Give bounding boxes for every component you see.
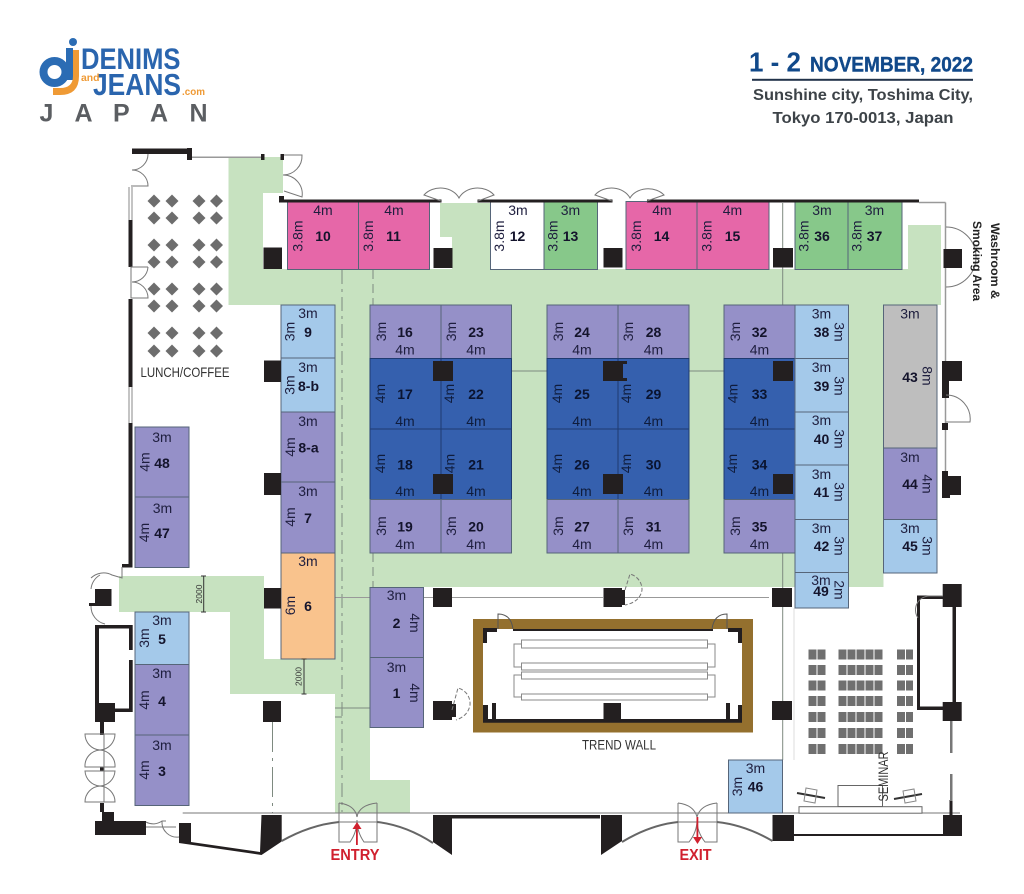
booth 33: 33: [752, 386, 767, 402]
booth 11: [358, 202, 430, 270]
booth 28: 3m: [620, 322, 636, 341]
booth 43: 43: [902, 369, 918, 385]
booth 4: 4: [158, 693, 166, 709]
booth 22: 22: [468, 386, 484, 402]
booth 7: [281, 482, 335, 553]
booth 49: 49: [813, 583, 829, 599]
booth 5: 3m: [152, 612, 172, 628]
booth 10: 3.8m: [290, 220, 306, 252]
booth 22: 4m: [466, 413, 486, 429]
thin building lines: [129, 157, 960, 813]
booth 28: [618, 305, 689, 358]
booth 35: [724, 500, 795, 553]
booth 44: 4m: [920, 474, 936, 494]
arrow: entry: [352, 822, 362, 845]
booth 2: 2: [393, 615, 401, 631]
dimension marker: 2000 top: 2000: [194, 584, 204, 603]
booth 13: 3.8m: [544, 220, 560, 252]
booth 1: 1: [393, 685, 401, 701]
booth 24: 4m: [572, 342, 592, 358]
label: washroom and smoking area: [970, 221, 1002, 301]
booth 41: [795, 465, 848, 520]
booth 12: 3.8m: [491, 220, 507, 252]
booth 4: [135, 664, 189, 735]
booth 48: 4m: [136, 452, 152, 472]
booth 16: [370, 305, 441, 358]
booth 15: 4m: [723, 202, 742, 218]
booth 23: 23: [468, 324, 484, 340]
booth 44: 44: [902, 476, 918, 492]
booth 8-a: [281, 412, 335, 482]
booth 8-b: 8-b: [298, 378, 319, 394]
booth 18: 4m: [372, 454, 388, 473]
booth 5: [135, 612, 189, 664]
label: washroom and smoking area: Washroom &: [988, 223, 1002, 299]
booth 27: 3m: [550, 516, 566, 536]
booth 48: 3m: [152, 429, 172, 445]
booth 40: 3m: [832, 429, 848, 449]
booth 1: 4m: [407, 683, 423, 703]
booth 23: 4m: [466, 342, 486, 358]
booth 24: 3m: [550, 322, 566, 341]
booth 38: 3m: [832, 322, 848, 342]
booth 26: [547, 429, 618, 500]
booth 2: 4m: [407, 613, 423, 633]
booth 27: 4m: [572, 536, 592, 552]
booth 43: 3m: [900, 306, 920, 322]
label: lunch/coffee: LUNCH/COFFEE: [140, 364, 230, 380]
booth 17: 4m: [372, 384, 388, 403]
booth 11: 3.8m: [360, 220, 376, 252]
booth 34: [724, 429, 795, 500]
booth 6: 6: [304, 598, 312, 614]
booth 30: 30: [646, 456, 661, 472]
booth 6: [281, 553, 335, 659]
booth 39: 3m: [812, 359, 831, 375]
booth 42: 42: [814, 538, 829, 554]
booth 28: 28: [646, 324, 661, 340]
booth 10: 4m: [313, 202, 333, 218]
booth 31: 3m: [620, 516, 636, 536]
booth 17: [370, 358, 441, 429]
booth 47: 4m: [136, 523, 152, 542]
booth 25: 25: [574, 386, 590, 402]
booth 30: 4m: [618, 454, 634, 473]
booth 3: [135, 735, 189, 806]
event date and venue: NOVEMBER, 2022: [810, 52, 973, 76]
booth 9: [281, 305, 335, 358]
booth 39: 39: [814, 378, 829, 394]
booth 34: 4m: [724, 454, 740, 473]
booth 42: 3m: [832, 536, 848, 556]
booth 14: 3.8m: [628, 220, 644, 252]
event date and venue: [749, 46, 973, 127]
booth 2: [370, 587, 424, 658]
booth 30: [618, 429, 689, 500]
booth 8-a: 3m: [298, 413, 318, 429]
booth 34: 4m: [750, 483, 769, 499]
booth 28: 4m: [644, 342, 663, 358]
booth 8-a: 8-a: [298, 440, 319, 456]
booth 31: [618, 500, 689, 553]
booth 38: 38: [814, 324, 829, 340]
booth 35: 4m: [750, 536, 769, 552]
dimension marker: 2000 top: [194, 576, 206, 612]
booth 19: [370, 500, 441, 553]
booth 9: 3m: [298, 305, 318, 321]
booth 1: 3m: [387, 659, 406, 675]
booth 14: 14: [654, 228, 669, 244]
logo: Denims and Jeans Japan: JAPAN: [40, 100, 208, 128]
booth 6: 6m: [282, 596, 298, 615]
booth 5: 5: [158, 631, 166, 647]
booth 46: [728, 760, 782, 813]
booth 39: 3m: [832, 376, 848, 396]
outer walls: [95, 148, 962, 855]
booth 6: 3m: [298, 553, 318, 569]
booth 7: 7: [304, 510, 312, 526]
booth 4: 3m: [152, 665, 172, 681]
booth 13: 3m: [561, 202, 580, 218]
booth 36: [795, 202, 848, 270]
booth 36: 3.8m: [796, 220, 812, 252]
booth 47: 3m: [153, 500, 172, 516]
booth 21: 4m: [466, 483, 486, 499]
booth 25: [547, 358, 618, 429]
booth 22: [441, 358, 512, 429]
booth 2: 3m: [387, 587, 406, 603]
booth 29: 29: [646, 386, 661, 402]
booth 9: 9: [304, 324, 312, 340]
booth 7: 3m: [298, 483, 318, 499]
booth 33: 4m: [724, 384, 740, 403]
booth 46: 46: [748, 778, 763, 794]
booth 18: 4m: [395, 483, 415, 499]
booth 12: 3m: [508, 202, 528, 218]
booth 48: 48: [154, 455, 170, 471]
booth 11: 11: [386, 228, 401, 244]
door swings: [85, 154, 976, 843]
booth 34: 34: [752, 456, 767, 472]
booth 3: 4m: [136, 760, 152, 780]
booth 23: [441, 305, 512, 358]
label: exit: EXIT: [680, 847, 712, 864]
booth 31: 31: [646, 518, 661, 534]
dimension marker: 2000 bottom: [294, 659, 306, 694]
booth 20: 3m: [443, 516, 459, 536]
booth 16: 3m: [373, 322, 389, 341]
booth 20: 20: [468, 518, 484, 534]
booth 8-b: 3m: [298, 359, 318, 375]
booth 27: 27: [574, 518, 590, 534]
booth 7: 4m: [282, 507, 298, 527]
logo: Denims and Jeans Japan: .com: [182, 86, 205, 98]
booth 25: 4m: [549, 384, 565, 403]
booth 24: 24: [574, 324, 590, 340]
booth 1: [370, 658, 424, 728]
booth 41: 3m: [832, 482, 848, 502]
booth 31: 4m: [644, 536, 663, 552]
booth 46: 3m: [729, 777, 745, 796]
booth 19: 3m: [373, 516, 389, 536]
booth 49: 2m: [832, 580, 848, 600]
booth 49: [795, 572, 848, 608]
booth 47: [135, 497, 189, 568]
booth 44: 3m: [900, 449, 920, 465]
booth 26: 4m: [549, 454, 565, 473]
lunch and coffee tables: [148, 194, 223, 358]
event date and venue: 1 - 2: [749, 46, 801, 78]
booth 37: 3m: [865, 202, 884, 218]
booth 5: 3m: [136, 628, 152, 648]
booth 13: 13: [563, 228, 578, 244]
booth 20: [441, 500, 512, 553]
booth 24: [547, 305, 618, 358]
booth 37: [848, 202, 902, 270]
booth 12: 12: [510, 228, 525, 244]
booth 15: [697, 202, 769, 270]
trend wall: [473, 614, 753, 732]
booth 12: [490, 202, 544, 270]
booth 14: [626, 202, 697, 270]
booth 21: [441, 429, 512, 500]
booth 4: 4m: [136, 690, 152, 710]
label: washroom and smoking area: Smoking Area: [970, 221, 984, 301]
visitor aisles (green): [119, 157, 941, 813]
booth 20: 4m: [466, 536, 486, 552]
booth 18: 18: [397, 456, 413, 472]
booth 37: 3.8m: [848, 220, 864, 252]
booth 48: [135, 427, 189, 497]
booth 10: 10: [315, 228, 331, 244]
booth 17: 17: [397, 386, 413, 402]
booth 46: 3m: [746, 760, 765, 776]
booth 14: 4m: [652, 202, 672, 218]
booth 18: [370, 429, 441, 500]
booth 42: 3m: [812, 520, 831, 536]
booth 47: 47: [154, 525, 170, 541]
booth 45: 3m: [900, 520, 920, 536]
logo: Denims and Jeans Japan: DENIMS: [81, 43, 180, 76]
arrow: exit: [693, 817, 702, 844]
booth 33: [724, 358, 795, 429]
booth 38: [795, 305, 848, 358]
booth 29: [618, 358, 689, 429]
booth 43: [884, 305, 937, 448]
booth 3: 3: [158, 763, 166, 779]
booth 22: 4m: [441, 384, 457, 403]
booth 21: 4m: [442, 454, 458, 473]
booth 16: 4m: [395, 342, 415, 358]
booth 37: 37: [867, 228, 882, 244]
booth 23: 3m: [443, 322, 459, 341]
booth 29: 4m: [644, 413, 663, 429]
booth 3: 3m: [152, 737, 172, 753]
booth 16: 16: [397, 324, 413, 340]
booth 36: 3m: [812, 202, 832, 218]
booth 45: 3m: [920, 536, 936, 556]
booth 32: [724, 305, 795, 358]
event date and venue: Sunshine city, Toshima City,: [753, 87, 973, 104]
logo: Denims and Jeans Japan: JEANS: [93, 67, 181, 102]
label: entry: ENTRY: [330, 847, 380, 864]
booth 15: 15: [725, 228, 740, 244]
dimension marker: 2000 bottom: 2000: [294, 667, 304, 686]
booth 10: [288, 202, 358, 270]
booth 40: 3m: [812, 412, 831, 428]
booth 38: 3m: [812, 306, 831, 322]
booth 45: 45: [902, 538, 918, 554]
booth 49: 3m: [811, 572, 831, 588]
booth 21: 21: [468, 456, 484, 472]
booth 30: 4m: [644, 483, 663, 499]
booth 42: [795, 520, 848, 572]
booth 35: 35: [752, 518, 767, 534]
booth 32: 4m: [750, 342, 769, 358]
booth 8-b: 3m: [282, 375, 298, 395]
logo: Denims and Jeans Japan: [40, 38, 208, 128]
booth 17: 4m: [395, 413, 415, 429]
booth 26: 4m: [572, 483, 592, 499]
booth 41: 41: [814, 484, 829, 500]
booth 41: 3m: [812, 466, 831, 482]
booth 44: [884, 448, 937, 520]
logo: Denims and Jeans Japan: and: [81, 73, 100, 84]
label: trend wall: TREND WALL: [582, 736, 656, 752]
label: seminar: SEMINAR: [875, 752, 891, 802]
event date and venue: Tokyo 170-0013, Japan: [772, 110, 954, 127]
booth 29: 4m: [618, 384, 634, 403]
booth 25: 4m: [572, 413, 592, 429]
booth 43: 8m: [920, 366, 936, 386]
booth 40: [795, 412, 848, 465]
booth 13: [544, 202, 598, 270]
booth 8-a: 4m: [282, 437, 298, 457]
booth 35: 3m: [727, 516, 743, 536]
booth 9: 3m: [282, 322, 298, 341]
booth 39: [795, 358, 848, 412]
booth 36: 36: [814, 228, 830, 244]
structural pillars: [89, 248, 962, 722]
booth 33: 4m: [750, 413, 769, 429]
booth 11: 4m: [384, 202, 404, 218]
seminar seating: [808, 654, 913, 749]
booth 26: 26: [574, 456, 590, 472]
booth 32: 32: [752, 324, 767, 340]
booth 27: [547, 500, 618, 553]
booth 45: [884, 520, 937, 573]
booth 19: 19: [397, 518, 413, 534]
booth 15: 3.8m: [698, 220, 714, 252]
booth 40: 40: [814, 431, 829, 447]
seminar stage: [797, 786, 922, 813]
booth 8-b: [281, 358, 335, 412]
booth 32: 3m: [727, 322, 743, 341]
booth 19: 4m: [395, 536, 415, 552]
